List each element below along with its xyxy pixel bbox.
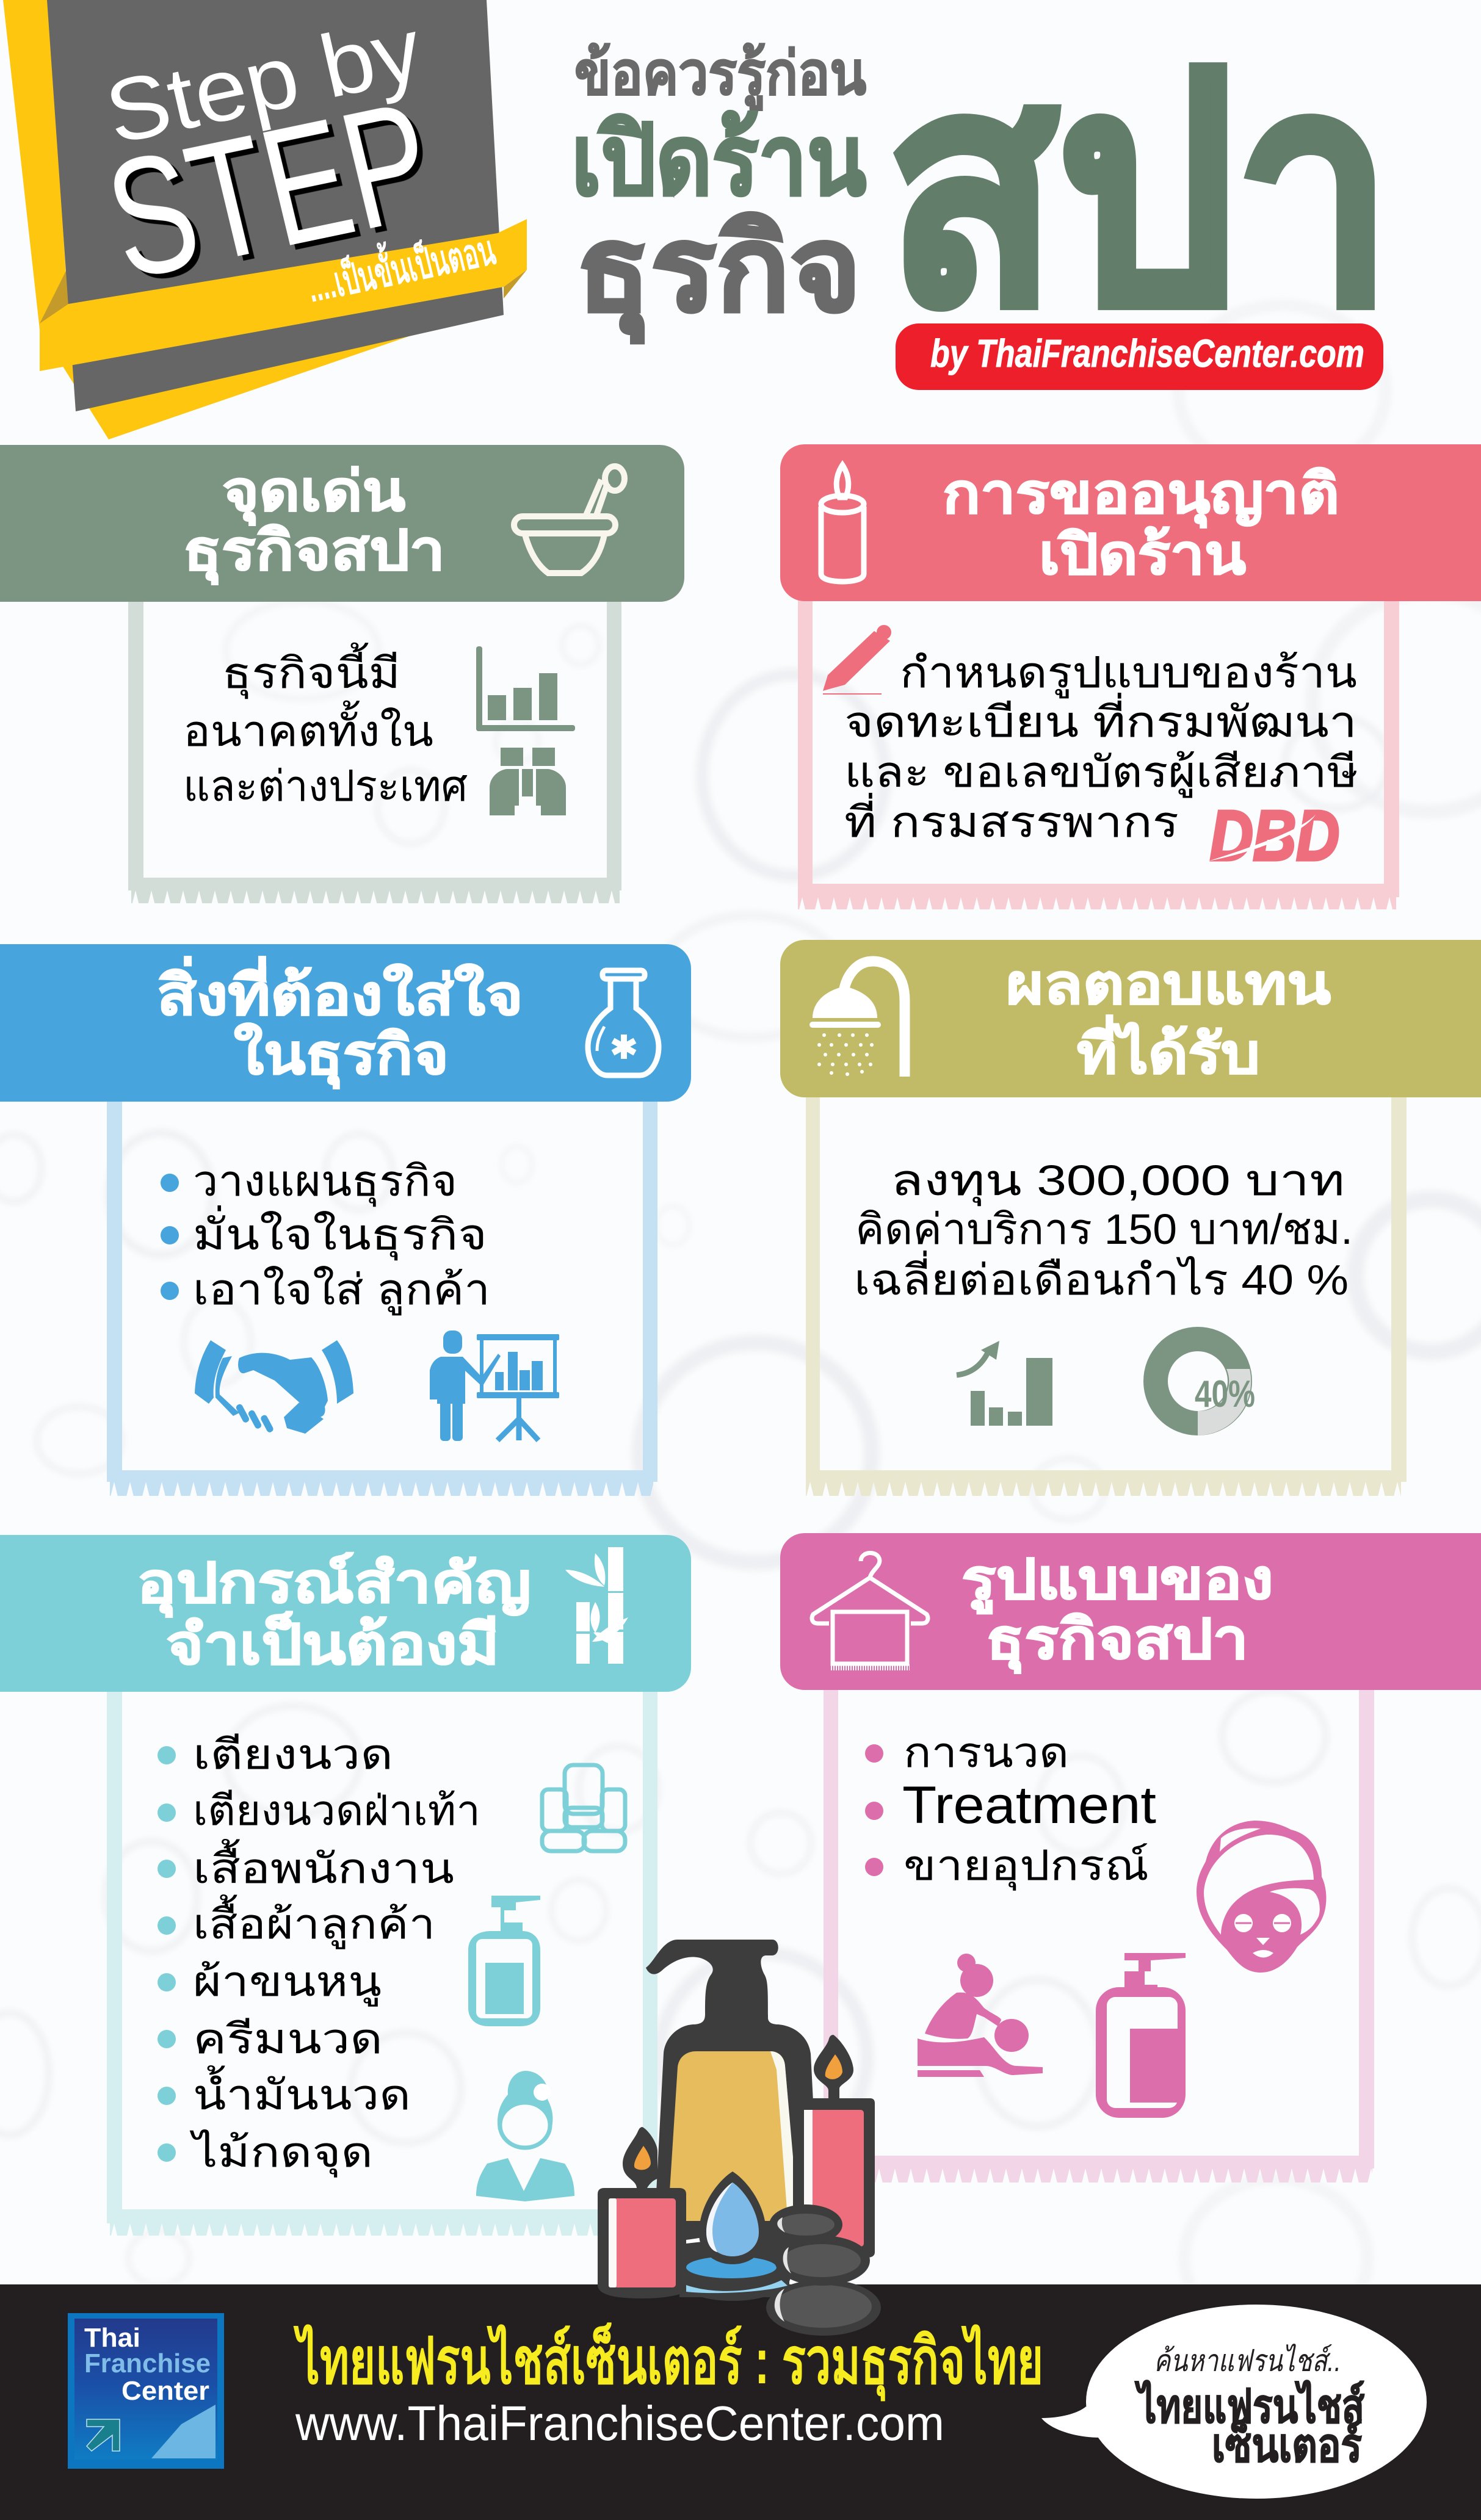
ribbon	[40, 219, 527, 371]
banner: step by step	[3, 0, 527, 439]
body text: จดทะเบียน ที่กรมพัฒนา	[844, 693, 1357, 746]
body text	[844, 649, 1358, 846]
header text: ธุรกิจสปา	[183, 520, 445, 585]
body text: อนาคตทั้งใน	[183, 700, 433, 755]
icon: towel on hanger	[812, 1553, 928, 1667]
icon: pen	[823, 625, 891, 695]
bullet list: เอาใจใส่ ลูกค้า	[193, 1265, 490, 1316]
icon: spa staff woman	[476, 2071, 574, 2201]
logo: Thai Franchise Center	[68, 2313, 224, 2469]
bullet list: วางแผนธุรกิจ	[193, 1157, 457, 1207]
bottle	[646, 1940, 818, 2228]
speech bubble: ค้นหาแฟรนไชส์..	[1154, 2344, 1341, 2378]
bullet list: การนวด	[903, 1730, 1069, 1776]
body text	[854, 1157, 1353, 1304]
title line 3: ธุรกิจ	[576, 203, 861, 344]
icon: rising bars	[957, 1341, 1052, 1426]
bullet list: เสื้อพนักงาน	[193, 1839, 454, 1892]
header text: ผลตอบแทน	[1006, 954, 1331, 1016]
body text: คิดค่าบริการ 150 บาท/ชม.	[855, 1205, 1353, 1253]
title line 2: เปิดร้าน	[571, 106, 866, 215]
icon: shower	[809, 961, 905, 1077]
bullet list: Treatment	[902, 1776, 1156, 1835]
stones	[766, 2204, 881, 2336]
logo: Thai Franchise Center: Center	[121, 2376, 209, 2406]
bullet list	[158, 1731, 480, 2178]
bullet list: ขายอุปกรณ์	[903, 1843, 1149, 1891]
speech bubble: เซ็นเตอร์	[1212, 2417, 1362, 2472]
footer headline: ไทยแฟรนไชส์เซ็นเตอร์ : รวมธุรกิจไทย	[293, 2322, 1043, 2402]
STEP: STEP	[91, 66, 449, 315]
panel: things to care about	[0, 944, 691, 1496]
body text: ธุรกิจนี้มี	[222, 642, 400, 699]
body text: และต่างประเทศ	[183, 762, 468, 810]
body text: ที่ กรมสรรพากร	[844, 793, 1179, 846]
footer url: www.ThaiFranchiseCenter.com	[295, 2396, 944, 2450]
body text: ลงทุน 300,000 บาท	[891, 1157, 1345, 1207]
panel: returns	[780, 940, 1481, 1496]
header text	[137, 1552, 531, 1676]
icon: bar chart	[476, 646, 575, 731]
water drop	[699, 2172, 766, 2264]
bullet list: เสื้อผ้าลูกค้า	[193, 1894, 435, 1949]
icon: candle	[821, 465, 864, 582]
header text: อุปกรณ์สำคัญ	[137, 1552, 531, 1618]
illustration: spa products	[598, 1940, 881, 2336]
footer text	[293, 2322, 1043, 2450]
icon: lotion bottle	[1096, 1953, 1186, 2118]
footer band	[0, 2284, 1481, 2520]
icon: massage	[918, 1954, 1043, 2077]
header text: จำเป็นต้องมี	[166, 1611, 499, 1676]
left candle	[598, 2127, 686, 2298]
header text: ธุรกิจสปา	[986, 1609, 1248, 1674]
logo: Thai Franchise Center: Franchise	[84, 2349, 211, 2378]
header text	[157, 956, 523, 1089]
basin	[675, 2221, 791, 2301]
icon: binoculars	[490, 748, 566, 815]
bullet list: มั่นใจในธุรกิจ	[193, 1205, 487, 1261]
title main word: สปา	[886, 14, 1393, 369]
credit pill: by ThaiFranchiseCenter.com	[930, 331, 1364, 375]
icon: handshake	[195, 1340, 353, 1434]
panel: licensing	[780, 444, 1481, 909]
header text	[183, 461, 445, 585]
bullet list	[161, 1157, 490, 1316]
icon: presenter	[430, 1330, 559, 1441]
panel header	[0, 445, 684, 602]
bullet list: ไม้กดจุด	[189, 2129, 373, 2178]
icon: bamboo	[565, 1547, 628, 1664]
header text: จุดเด่น	[222, 461, 405, 526]
icon: mortar and pestle	[514, 466, 625, 573]
panel: spa business models	[780, 1533, 1481, 2182]
panel: essential equipment	[0, 1535, 691, 2236]
right candle	[803, 2035, 875, 2258]
credit pill	[896, 323, 1383, 390]
title	[571, 14, 1393, 390]
icon: towels	[542, 1765, 625, 1851]
icon: lotion bottle	[468, 1896, 540, 2026]
panel header	[0, 944, 691, 1102]
icon: flask	[588, 970, 659, 1075]
header text: การขออนุญาติ	[943, 463, 1339, 529]
bullet list: น้ำมันนวด	[193, 2065, 411, 2118]
bullet list: เตียงนวด	[193, 1731, 393, 1778]
bullet list	[865, 1730, 1156, 1891]
chart: donut 40%	[1156, 1339, 1255, 1435]
body text: กำหนดรูปแบบของร้าน	[900, 649, 1357, 699]
chart: donut 40%: 40%	[1195, 1373, 1255, 1415]
bullet list: ครีมนวด	[193, 2016, 383, 2062]
speech bubble: ไทยแฟรนไชส์	[1134, 2380, 1364, 2433]
header text: รูปแบบของ	[961, 1549, 1273, 1614]
panel header	[0, 1535, 691, 1692]
panel header	[780, 444, 1481, 601]
speech bubble	[1041, 2305, 1427, 2499]
bullet list: ผ้าขนหนู	[193, 1959, 382, 2007]
header text	[943, 463, 1339, 586]
ribbon caption: ....เป็นขั้นเป็นตอน	[301, 219, 500, 311]
header text: สิ่งที่ต้องใส่ใจ	[157, 956, 523, 1027]
title line 1: ข้อควรรู้ก่อน	[574, 40, 866, 111]
header text	[1006, 954, 1331, 1085]
header text: เปิดร้าน	[1039, 524, 1246, 586]
header text: ในธุรกิจ	[234, 1023, 449, 1089]
icon: face mask	[1197, 1821, 1326, 1973]
bullet list: เตียงนวดฝ่าเท้า	[193, 1788, 480, 1834]
logo: Thai Franchise Center: Thai	[84, 2323, 140, 2353]
panel: highlights	[0, 445, 684, 903]
step by: Step by	[96, 0, 430, 162]
body text	[183, 642, 468, 810]
body text: และ ขอเลขบัตรผู้เสียภาษี	[844, 748, 1358, 798]
panel header	[780, 940, 1481, 1097]
body text: เฉลี่ยต่อเดือนกำไร 40 %	[854, 1251, 1349, 1304]
panel header	[780, 1533, 1481, 1690]
header text	[961, 1549, 1273, 1674]
header text: ที่ได้รับ	[1077, 1015, 1260, 1085]
logo: DBD: DBD	[1210, 796, 1339, 875]
